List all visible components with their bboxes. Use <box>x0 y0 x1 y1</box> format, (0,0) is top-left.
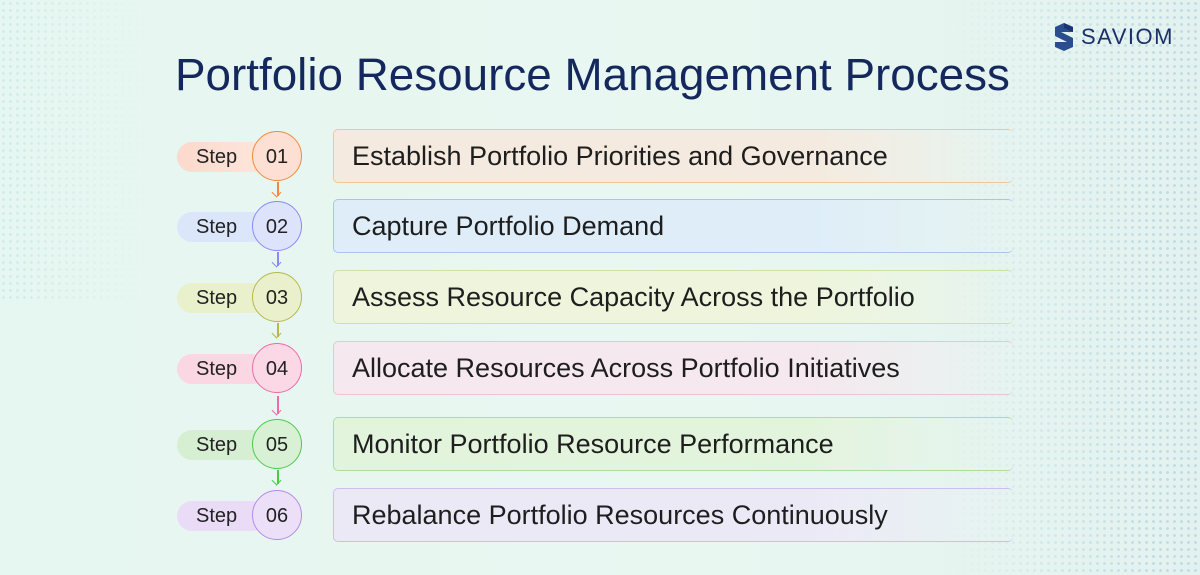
title: Portfolio Resource Management Process <box>175 49 1010 100</box>
step 01 <box>177 129 1013 198</box>
step 05: Step <box>196 434 237 456</box>
step 05: 05 <box>266 434 288 456</box>
step 03: Step <box>196 287 237 309</box>
step 02: Step <box>196 216 237 238</box>
step 01: Step <box>196 146 237 168</box>
step 02: 02 <box>266 216 288 238</box>
logo: Saviom <box>1055 23 1174 51</box>
step 03: Assess Resource Capacity Across the Portfolio <box>352 282 915 312</box>
step 05 <box>177 417 1013 486</box>
step 01: Establish Portfolio Priorities and Governance <box>352 141 888 171</box>
step 04: Step <box>196 358 237 380</box>
step 01: 01 <box>266 146 288 168</box>
step 04: Allocate Resources Across Portfolio Initiatives <box>352 353 900 383</box>
step 03: 03 <box>266 287 288 309</box>
step 05: Monitor Portfolio Resource Performance <box>352 429 834 459</box>
step 06: Step <box>196 505 237 527</box>
step 06: 06 <box>266 505 288 527</box>
step 04 <box>177 341 1013 416</box>
step 02 <box>177 199 1013 268</box>
step 06 <box>177 488 1013 542</box>
logo: Saviom: SAVIOM <box>1081 24 1174 49</box>
step 04: 04 <box>266 358 288 380</box>
step 06: Rebalance Portfolio Resources Continuously <box>352 500 888 530</box>
step 02: Capture Portfolio Demand <box>352 211 664 241</box>
step 03 <box>177 270 1013 338</box>
